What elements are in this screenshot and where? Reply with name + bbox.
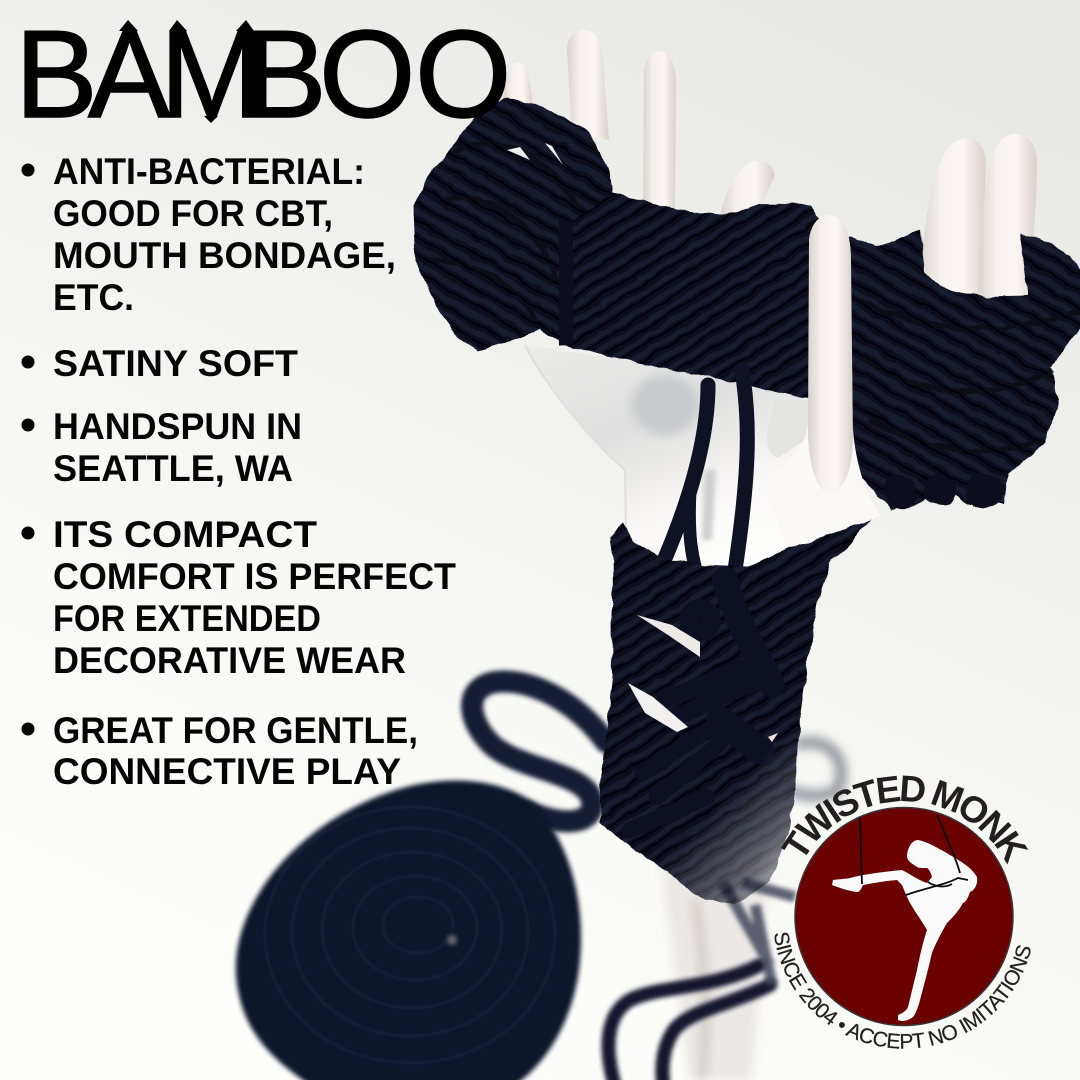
photo: mannequin palm and wrist bbox=[525, 345, 875, 575]
photo: blurred lower mannequin arm bbox=[660, 860, 770, 1080]
logo: tagline: SINCE 2004 • ACCEPT NO IMITATIONS bbox=[774, 932, 1031, 1049]
bullet: compact comfort: COMFORT IS PERFECT bbox=[53, 556, 456, 597]
photo: mannequin back fingers bbox=[503, 30, 1037, 315]
photo: small gaps in left rope bundle bbox=[507, 143, 563, 165]
photo: mannequin thumb bbox=[808, 215, 853, 495]
bullet: gentle play: CONNECTIVE PLAY bbox=[53, 751, 401, 792]
bullet: anti-bacterial bbox=[22, 151, 396, 318]
photo: blurred rope behind forearm bbox=[790, 742, 841, 796]
bullet: anti-bacterial: GOOD FOR CBT, bbox=[53, 193, 333, 234]
bullet: anti-bacterial: ETC. bbox=[53, 277, 134, 318]
photo: blurred rope coil bbox=[236, 781, 581, 1080]
photo: white gaps in forearm wrap bbox=[628, 615, 778, 742]
logo: Twisted Monk wordmark: TWISTED MONK bbox=[781, 776, 1028, 864]
bullet: anti-bacterial: ANTI-BACTERIAL: bbox=[53, 151, 365, 192]
photo: vertical rope cross wrap bbox=[560, 222, 572, 345]
photo: rope wrapped forearm bbox=[600, 520, 870, 905]
bullet: anti-bacterial: MOUTH BONDAGE, bbox=[53, 235, 396, 276]
logo: red circle bbox=[795, 808, 1013, 1026]
bullet: handspun: HANDSPUN IN bbox=[53, 406, 302, 447]
bullet: satiny soft: SATINY SOFT bbox=[53, 343, 298, 384]
photo: rope bundle left bbox=[413, 99, 612, 351]
title: BAMBOO bbox=[15, 6, 511, 144]
logo: suspended figure silhouette bbox=[832, 840, 977, 1021]
logo: Twisted Monk badge bbox=[774, 776, 1031, 1049]
bullet: compact comfort: FOR EXTENDED bbox=[53, 598, 321, 639]
photo: loose rope ends bbox=[609, 965, 770, 1080]
logo: suspension ropes bbox=[860, 815, 968, 895]
bullet: compact comfort: ITS COMPACT bbox=[53, 514, 317, 555]
photo: faded ropes below arm bbox=[723, 883, 795, 985]
photo: hanging rope strands bbox=[660, 370, 747, 590]
bullet: handspun: SEATTLE, WA bbox=[53, 448, 293, 489]
bullet: gentle play: GREAT FOR GENTLE, bbox=[53, 710, 418, 751]
photo: rope bundle right bbox=[835, 230, 1080, 510]
photo: white palm base below thumb bbox=[760, 425, 880, 555]
bullet: compact comfort bbox=[22, 514, 456, 681]
bullet: compact comfort: DECORATIVE WEAR bbox=[53, 640, 406, 681]
photo: crossing rope lashings bbox=[630, 580, 772, 830]
photo: rope wrap around palm bbox=[560, 193, 830, 400]
photo: blurred rope loop bbox=[472, 682, 606, 821]
bullet: handspun bbox=[22, 406, 302, 489]
bullet: gentle play bbox=[22, 710, 418, 792]
